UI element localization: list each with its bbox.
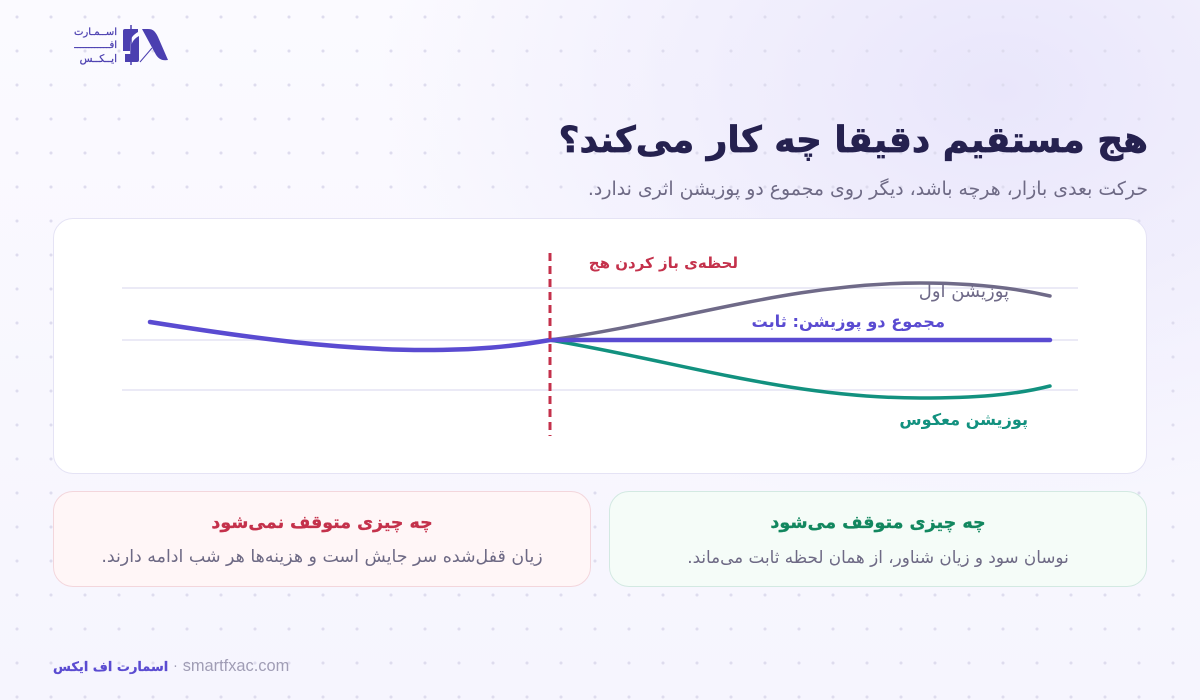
line chart (122, 253, 1078, 436)
panel: what stops (609, 491, 1147, 587)
logo: افــــــــــــ (73, 40, 117, 51)
title: هج مستقیم دقیقا چه کار می‌کند؟ (559, 120, 1148, 161)
line chart: پوزیشن معکوس (899, 410, 1028, 430)
panel: chart (53, 218, 1147, 474)
line chart: لحظه‌ی باز کردن هج (589, 254, 738, 272)
heading: what does not stop: چه چیزی متوقف نمی‌شود (211, 513, 433, 533)
logo: ایــکــس (80, 53, 117, 65)
subtitle: حرکت بعدی بازار، هرچه باشد، دیگر روی مجموع دو پوزیشن اثری ندارد. (588, 178, 1148, 200)
line chart: مجموع دو پوزیشن: ثابت (751, 312, 945, 332)
logo (73, 25, 168, 65)
logo: اســمـارت (74, 27, 117, 38)
text: what stops: نوسان سود و زیان شناور، از همان لحظه ثابت می‌ماند. (687, 547, 1069, 567)
footer: اسمارت اف ایکس · smartfxac.com (53, 657, 289, 675)
panel: what does not stop (53, 491, 591, 587)
text: what does not stop: زیان قفل‌شده سر جایش است و هزینه‌ها هر شب ادامه دارند. (101, 547, 543, 567)
line chart: پوزیشن اول (919, 281, 1009, 302)
heading: what stops: چه چیزی متوقف می‌شود (770, 513, 986, 533)
